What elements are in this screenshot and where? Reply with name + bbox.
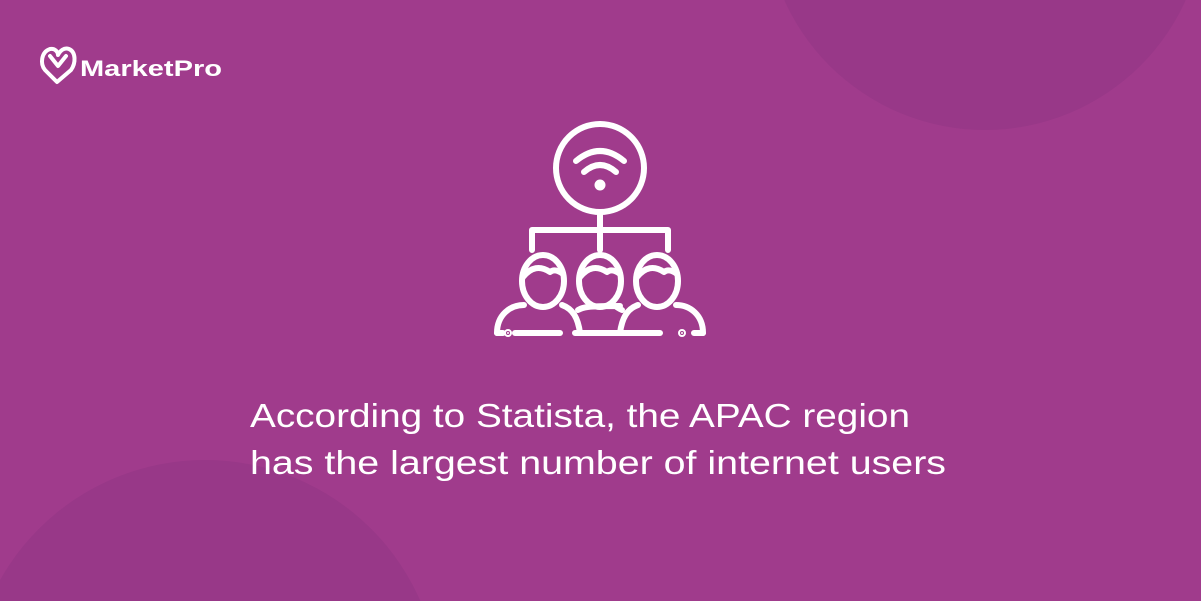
connectors bbox=[532, 212, 668, 250]
icon: network of internet users bbox=[497, 124, 703, 334]
logo icon bbox=[42, 48, 75, 82]
bodies bbox=[497, 305, 524, 333]
people heads bbox=[522, 255, 564, 307]
caption text: According to Statista, the APAC region bbox=[250, 397, 910, 434]
caption text: has the largest number of internet users bbox=[250, 444, 946, 481]
caption text bbox=[250, 397, 946, 481]
wifi circle bbox=[556, 124, 644, 212]
logo wordmark: MarketPro bbox=[80, 56, 222, 81]
logo bbox=[42, 48, 222, 82]
